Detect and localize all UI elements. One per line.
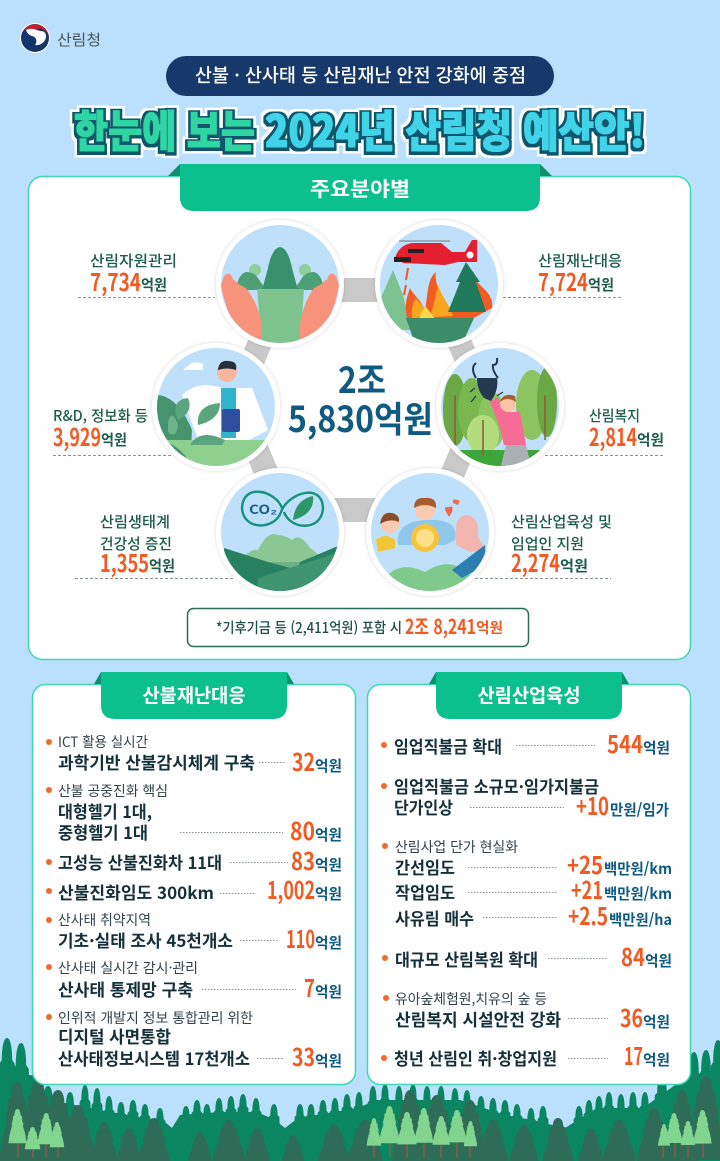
item: 청년 산림인 취·창업지원: 17: [624, 1037, 643, 1072]
icon: researcher with plant: [152, 343, 280, 471]
item: 청년 산림인 취·창업지원: 억원: [643, 1049, 670, 1070]
item: 청년 산림인 취·창업지원: [381, 1037, 670, 1072]
item: 소규모·임가지불금 단가인상: 만원/임가: [610, 799, 669, 820]
item: 산림복지 시설안전 강화: 36: [620, 999, 643, 1034]
item: 산사태 통제망 구축: 억원: [315, 981, 342, 1002]
callout: 기후기금 포함 총액: 억원: [476, 617, 503, 638]
panel: 산불재난대응: [32, 672, 356, 1084]
item: 산사태 통제망 구축: [46, 958, 342, 1004]
item: 대형헬기 중형헬기: 80: [290, 812, 315, 847]
item: 임업직불금 확대: 억원: [643, 737, 670, 758]
heading tab: 주요분야별: 주요분야별: [310, 173, 410, 202]
label: 산림복지: 억원: [637, 429, 664, 450]
item: 대형헬기 중형헬기: 중형헬기 1대: [58, 819, 148, 844]
item: 대형헬기 중형헬기: 산불 공중진화 핵심: [58, 781, 168, 801]
label: 산림산업육성 및 임업인 지원: 임업인 지원: [511, 533, 584, 554]
label: 산림자원관리: 7,734: [90, 263, 141, 298]
label: 산림생태계 건강성 증진: 건강성 증진: [100, 533, 172, 554]
item: 임업직불금 확대: 임업직불금 확대: [394, 733, 502, 758]
callout: 기후기금 포함 총액: *기후기금 등 (2,411억원) 포함 시: [216, 617, 402, 638]
item: 기초·실태 조사: [46, 910, 342, 955]
logo: 산림청: [20, 23, 101, 53]
item: 산불진화임도: 억원: [315, 883, 342, 904]
label: R&D, 정보화 등: 3,929: [53, 418, 101, 453]
item: 산림사업 단가 현실화: +25: [567, 846, 603, 881]
item: 청년 산림인 취·창업지원: 청년 산림인 취·창업지원: [394, 1045, 557, 1070]
icon: forestry workers and coin: [366, 468, 494, 596]
label: 산림생태계 건강성 증진: [75, 511, 235, 579]
item: 과학기반 산불감시체계 구축: 억원: [315, 755, 342, 776]
item: 기초·실태 조사: 110: [286, 920, 315, 955]
item: 디지털 사면통합: 디지털 사면통합: [58, 1023, 171, 1048]
item: 기초·실태 조사: 기초·실태 조사 45천개소: [58, 927, 233, 952]
item: 고성능 산불진화차: [46, 842, 342, 877]
item: 산림복지 시설안전 강화: 산림복지 시설안전 강화: [395, 1006, 561, 1031]
item: 디지털 사면통합: [46, 1008, 342, 1073]
label: 산림생태계 건강성 증진: 억원: [149, 555, 175, 576]
item: 과학기반 산불감시체계 구축: 과학기반 산불감시체계 구축: [58, 749, 255, 774]
main title: 한눈에 보는: [74, 96, 255, 160]
label: 산림재난대응: 억원: [588, 274, 614, 295]
subtitle pill: [166, 56, 554, 96]
item: 고성능 산불진화차: 고성능 산불진화차 11대: [58, 849, 222, 874]
label: 산림자원관리: 억원: [141, 274, 167, 295]
item: 대형헬기 중형헬기: 억원: [315, 824, 342, 845]
label: 산림재난대응: 산림재난대응: [538, 250, 622, 271]
heading tab: 산림산업육성: 산림산업육성: [478, 681, 580, 708]
item: 산림사업 단가 현실화: +21: [571, 871, 603, 906]
item: 디지털 사면통합: 산사태정보시스템 17천개소: [58, 1045, 250, 1070]
main title: 2024년 산림청 예산안!: [265, 96, 645, 160]
item: 산림사업 단가 현실화: 간선임도: [395, 854, 455, 879]
heading tab: 산림산업육성: [429, 672, 629, 719]
item: 과학기반 산불감시체계 구축: ICT 활용 실시간: [58, 732, 148, 752]
item: 산림사업 단가 현실화: 백만원/km: [604, 883, 672, 904]
item: 임업직불금 확대: 544: [607, 725, 643, 760]
item: 산림사업 단가 현실화: +2.5: [568, 897, 608, 932]
item: 대규모 산림복원 확대: 대규모 산림복원 확대: [395, 946, 538, 971]
icon: CO2 cycle and mountains: CO₂: [249, 499, 277, 518]
label: 산림산업육성 및 임업인 지원: 2,274: [511, 544, 560, 579]
heading tab: 산불재난대응: 산불재난대응: [142, 681, 246, 708]
logo: 산림청: 산림청: [57, 29, 101, 50]
label: 산림산업육성 및 임업인 지원: 산림산업육성 및: [511, 511, 612, 532]
icon: forest in hands: [216, 220, 344, 348]
item: 기초·실태 조사: 억원: [315, 932, 342, 953]
item: 대규모 산림복원 확대: 84: [621, 938, 645, 973]
label: 산림자원관리: 산림자원관리: [90, 250, 177, 271]
center total: 5,830억원: [288, 391, 433, 443]
item: 산불진화임도: 산불진화임도 300km: [58, 879, 214, 904]
label: 산림복지: 산림복지: [589, 405, 640, 426]
item: 소규모·임가지불금 단가인상: [381, 773, 669, 822]
center total: 2조: [338, 352, 386, 404]
label: R&D, 정보화 등: [53, 405, 172, 456]
label: 산림재난대응: 7,724: [538, 263, 588, 298]
item: 산사태 통제망 구축: 산사태 통제망 구축: [58, 976, 193, 1001]
center total: [288, 352, 433, 443]
label: 산림재난대응: [503, 250, 622, 298]
item: 산림복지 시설안전 강화: [383, 989, 670, 1034]
label: 산림자원관리: [78, 250, 215, 298]
item: 고성능 산불진화차: 억원: [315, 854, 342, 875]
item: 대규모 산림복원 확대: 억원: [645, 950, 672, 971]
item: 산림사업 단가 현실화: [382, 837, 672, 932]
item: 산사태 통제망 구축: 7: [304, 969, 315, 1004]
item: 대형헬기 중형헬기: 대형헬기 1대,: [58, 798, 152, 823]
label: 산림산업육성 및 임업인 지원: [475, 511, 612, 579]
item: 기초·실태 조사: 산사태 취약지역: [58, 910, 151, 930]
item: 산림사업 단가 현실화: 백만원/km: [604, 858, 672, 879]
item: 산림사업 단가 현실화: 산림사업 단가 현실화: [395, 837, 518, 857]
icon: CO2 cycle and mountains: [216, 468, 344, 600]
label: R&D, 정보화 등: R&D, 정보화 등: [53, 405, 148, 426]
label: 산림복지: 2,814: [589, 418, 637, 453]
label: 산림생태계 건강성 증진: 산림생태계: [100, 511, 170, 532]
item: 소규모·임가지불금 단가인상: +10: [576, 787, 609, 822]
item: 디지털 사면통합: 억원: [315, 1050, 342, 1071]
item: 산불진화임도: [46, 871, 342, 906]
label: 산림복지: [545, 405, 665, 456]
item: 산사태 통제망 구축: 산사태 실시간 감시·관리: [58, 958, 198, 978]
item: 소규모·임가지불금 단가인상: 임업직불금 소규모·임가지불금: [394, 773, 599, 798]
callout: 기후기금 포함 총액: 2조 8,241: [405, 611, 476, 640]
subtitle pill: 산불 · 산사태 등 산림재난 안전 강화에 중점: [195, 62, 526, 88]
panel: 산림산업육성: [368, 672, 690, 1084]
item: 대형헬기 중형헬기: [46, 781, 342, 847]
item: 산림복지 시설안전 강화: 유아숲체험원,치유의 숲 등: [395, 989, 547, 1009]
item: 소규모·임가지불금 단가인상: 단가인상: [394, 794, 453, 819]
item: 임업직불금 확대: [381, 725, 670, 760]
item: 디지털 사면통합: 인위적 개발지 정보 통합관리 위한: [58, 1008, 253, 1028]
icon: stag beetle and forest walker: [436, 343, 564, 471]
panel: 주요분야별: [28, 164, 690, 660]
item: 산불진화임도: 1,002: [267, 871, 315, 906]
item: 산림복지 시설안전 강화: 억원: [643, 1011, 670, 1032]
item: 디지털 사면통합: 33: [292, 1038, 315, 1073]
main title: [74, 96, 645, 160]
label: R&D, 정보화 등: 억원: [101, 429, 127, 450]
callout: 기후기금 포함 총액: [188, 608, 528, 646]
item: 고성능 산불진화차: 83: [291, 842, 315, 877]
item: 산림사업 단가 현실화: 작업임도: [395, 879, 455, 904]
item: 과학기반 산불감시체계 구축: [46, 732, 342, 778]
label: 산림생태계 건강성 증진: 1,355: [100, 544, 149, 579]
item: 과학기반 산불감시체계 구축: 32: [292, 743, 315, 778]
item: 대규모 산림복원 확대: [382, 938, 672, 973]
icon: helicopter and forest fire: [375, 220, 503, 348]
heading tab: 산불재난대응: [94, 672, 294, 719]
hexagon ring: [236, 290, 484, 510]
forest illustration at bottom: [0, 1038, 720, 1161]
heading tab: 주요분야별: [168, 164, 552, 211]
label: 산림산업육성 및 임업인 지원: 억원: [560, 555, 588, 576]
item: 산림사업 단가 현실화: 백만원/ha: [609, 909, 672, 930]
item: 산림사업 단가 현실화: 사유림 매수: [395, 905, 474, 930]
